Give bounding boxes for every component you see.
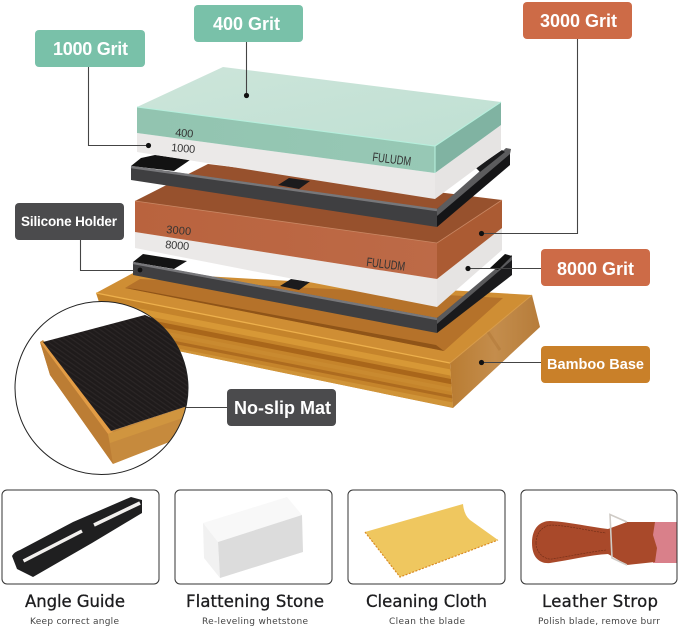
- label: 1000 Grit: 1000 Grit: [53, 39, 128, 59]
- upper white stone, 1000 grit: [137, 125, 501, 199]
- label: 1000 on stone: 1000: [171, 142, 196, 156]
- label: 8000 Grit: 8000 Grit: [557, 259, 634, 279]
- leader: No-slip Mat: [186, 406, 227, 408]
- icon: flattening stone: [203, 497, 303, 578]
- heading: Flattening Stone: [186, 592, 324, 611]
- icon: angle guide: [12, 497, 142, 577]
- leader: Silicone Holder: [80, 240, 142, 272]
- leader: 3000 Grit: [479, 39, 578, 236]
- icon: cleaning cloth: [365, 504, 498, 577]
- heading: Leather Strop: [542, 592, 658, 611]
- leader: 8000 Grit: [465, 266, 541, 271]
- bamboo base: [96, 272, 540, 408]
- caption: Re-leveling whetstone: [202, 617, 308, 627]
- heading: Cleaning Cloth: [366, 592, 487, 611]
- panel: leather strop: [521, 490, 677, 627]
- panel: cleaning cloth: [348, 490, 505, 627]
- icon: leather strop: [532, 514, 676, 565]
- label: Silicone Holder: [15, 203, 124, 240]
- label: 400 Grit: [194, 5, 303, 42]
- label: 400 on stone: 400: [175, 127, 194, 141]
- label: Bamboo Base: [541, 346, 650, 383]
- label: 3000 on stone: 3000: [166, 224, 192, 238]
- caption: Keep correct angle: [30, 617, 119, 627]
- label: 8000 on stone: 8000: [165, 239, 190, 253]
- black rubber mat: [43, 315, 200, 431]
- panel: angle guide: [2, 490, 159, 627]
- leader: 400 Grit: [244, 42, 249, 98]
- label: 3000 Grit: 3000 Grit: [540, 11, 617, 31]
- label: 3000 Grit: [523, 2, 632, 39]
- callout circle: no-slip mat detail: [15, 302, 200, 474]
- leader: 1000 Grit: [88, 67, 151, 148]
- upper green stone, 400 grit: [137, 67, 501, 173]
- label: No-slip Mat: [227, 389, 336, 426]
- lower white stone, 8000 grit: [135, 228, 502, 307]
- label: 1000 Grit: [35, 30, 145, 67]
- label: Bamboo Base: Bamboo Base: [547, 357, 644, 373]
- label: No-slip Mat: No-slip Mat: [234, 398, 331, 418]
- heading: Angle Guide: [25, 592, 125, 611]
- brand text lower: FULUDM: [366, 256, 406, 274]
- caption: Clean the blade: [389, 617, 465, 627]
- silicone holder lower: [133, 254, 512, 333]
- panel: flattening stone: [175, 490, 332, 627]
- wood edge of detail: [40, 340, 200, 464]
- label: 8000 Grit: [541, 249, 650, 286]
- brand text upper: FULUDM: [372, 151, 412, 169]
- label: Silicone Holder: Silicone Holder: [21, 214, 118, 229]
- caption: Polish blade, remove burr: [538, 617, 660, 627]
- base recess: [125, 279, 503, 351]
- silicone holder upper: [131, 148, 511, 227]
- leader: Bamboo Base: [479, 360, 541, 365]
- label: 400 Grit: 400 Grit: [213, 14, 280, 34]
- lower brown stone, 3000 grit: [135, 164, 502, 279]
